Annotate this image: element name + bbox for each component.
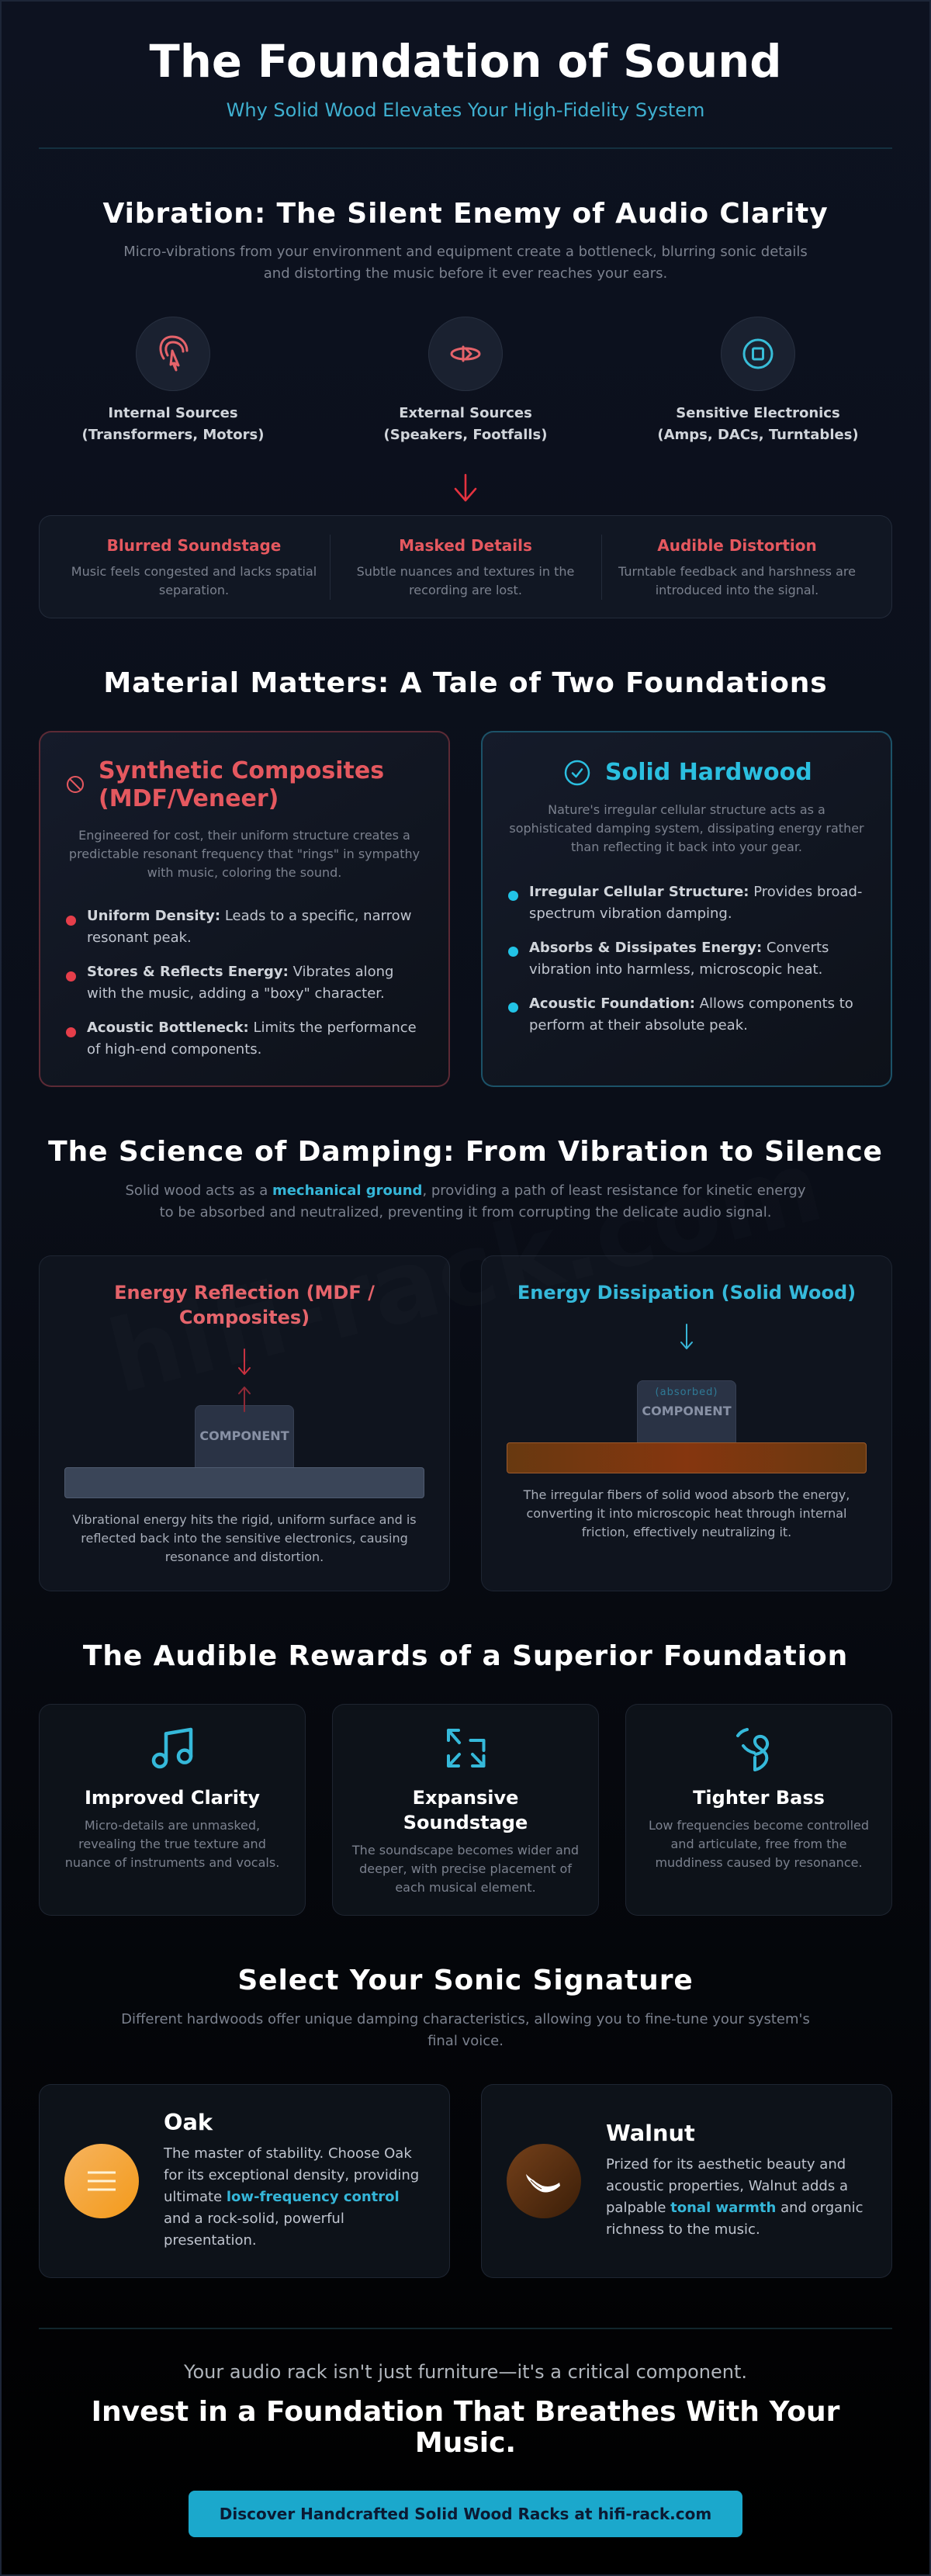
hardwood description: Nature's irregular cellular structure acts as a xyxy=(548,802,825,817)
label: external sources xyxy=(383,405,547,443)
effect text: masked details: Subtle nuances and textures in the xyxy=(357,564,574,579)
label: sensitive electronics xyxy=(657,405,859,443)
component label: COMPONENT xyxy=(642,1404,732,1418)
arrows: incoming and reflected energy xyxy=(238,1349,251,1412)
reward text: deeper, with precise placement of xyxy=(359,1861,572,1876)
signature description xyxy=(121,2011,810,2049)
label: sensitive electronics: (Amps, DACs, Turntables) xyxy=(657,427,859,443)
reward text xyxy=(65,1818,279,1870)
component box xyxy=(195,1405,294,1468)
panel: solid hardwood xyxy=(481,731,892,1087)
bullet: absorbs energy xyxy=(508,947,518,957)
platform: solid wood xyxy=(507,1442,867,1473)
reflection explanation: resonance and distortion. xyxy=(165,1549,324,1564)
oak text: The master of stability. Choose Oak xyxy=(164,2145,412,2162)
subtitle: Why Solid Wood Elevates Your High-Fidelity System xyxy=(227,99,704,121)
bullet text: cellular structure xyxy=(529,883,862,922)
oak text xyxy=(163,2145,419,2249)
damping description: to be absorbed and neutralized, preventing it from corrupting the delicate audio signal. xyxy=(160,1204,771,1220)
closing headline: Music. xyxy=(415,2427,516,2459)
icon: oak swatch xyxy=(64,2144,139,2218)
oak text: ultimate low-frequency control xyxy=(164,2189,400,2205)
effect text: audible distortion: Turntable feedback and harshness are xyxy=(618,564,856,579)
heading: sonic signature: Select Your Sonic Signature xyxy=(237,1965,694,1996)
vibration description: Micro-vibrations from your environment and equipment create a bottleneck, blurring sonic details xyxy=(123,244,808,260)
bullet text: absorbs energy: Absorbs & Dissipates Energy: Converts xyxy=(529,939,829,956)
oak title: Oak xyxy=(164,2109,213,2135)
reflection explanation: Vibrational energy hits the rigid, uniform surface and is xyxy=(72,1511,417,1527)
signature description: final voice. xyxy=(427,2033,504,2049)
reward title: Tighter Bass xyxy=(693,1787,825,1809)
heading: solid hardwood: Solid Hardwood xyxy=(605,759,812,786)
heading: energy reflection: Composites) xyxy=(179,1307,310,1328)
effect text: audible distortion: introduced into the signal. xyxy=(656,583,819,597)
bullet text: acoustic foundation xyxy=(529,995,853,1034)
heading: energy reflection xyxy=(114,1282,375,1328)
bullet: acoustic bottleneck xyxy=(66,1027,76,1037)
effect text: blurred soundstage: separation. xyxy=(159,583,229,597)
reward text: The soundscape becomes wider and xyxy=(352,1843,579,1858)
component label: COMPONENT xyxy=(199,1428,289,1443)
bullet text: uniform density: resonant peak. xyxy=(87,930,192,946)
dissipation explanation: The irregular fibers of solid wood absorb the energy, xyxy=(524,1487,850,1502)
heading: material matters: Material Matters: A Tale of Two Foundations xyxy=(103,667,828,699)
synthetic description: with music, coloring the sound. xyxy=(147,865,341,880)
heading: synthetic composites: Synthetic Composites xyxy=(99,757,384,784)
effect: audible distortion: Audible Distortion xyxy=(657,536,817,555)
effect text: masked details: recording are lost. xyxy=(409,583,522,597)
panel: expansive soundstage xyxy=(332,1704,599,1916)
label: internal sources xyxy=(82,405,264,443)
effect: blurred soundstage: Blurred Soundstage xyxy=(107,536,281,555)
reward text: Low frequencies become controlled xyxy=(649,1818,869,1833)
header divider xyxy=(39,147,892,149)
footer divider xyxy=(39,2328,892,2329)
dissipation explanation: friction, effectively neutralizing it. xyxy=(582,1525,791,1539)
bullet text: acoustic foundation: perform at their absolute peak. xyxy=(529,1016,748,1034)
bullet text: stores energy xyxy=(87,964,393,1002)
closing line: Your audio rack isn't just furniture—it's a critical component. xyxy=(184,2361,747,2383)
panel: synthetic composites xyxy=(39,731,450,1087)
heading: vibration: Vibration: The Silent Enemy of Audio Clarity xyxy=(102,198,829,230)
reward text: revealing the true texture and xyxy=(78,1837,266,1851)
reward title xyxy=(403,1787,528,1833)
damping description xyxy=(126,1182,805,1220)
panel: oak xyxy=(39,2084,450,2278)
absorbed label: (absorbed) xyxy=(656,1387,718,1398)
synthetic description: predictable resonant frequency that "rings" in sympathy xyxy=(69,847,420,861)
reward text xyxy=(649,1818,869,1870)
icon: check circle xyxy=(565,760,590,785)
closing headline xyxy=(92,2396,839,2459)
reward title: Improved Clarity xyxy=(85,1787,260,1809)
bullet text: stores energy: Stores & Reflects Energy: Vibrates along xyxy=(87,964,393,980)
icon: expand arrows xyxy=(447,1729,486,1768)
bullet: uniform density xyxy=(66,916,76,926)
panel: tighter bass xyxy=(625,1704,892,1916)
reflection explanation xyxy=(72,1511,417,1564)
arrow: incoming energy xyxy=(680,1324,693,1349)
call to action button: Discover Handcrafted Solid Wood Racks at hifi-rack.com xyxy=(220,2505,711,2523)
reward text: nuance of instruments and vocals. xyxy=(65,1855,279,1870)
bullet text: cellular structure: Irregular Cellular Structure: Provides broad- xyxy=(529,883,862,900)
heading: science of damping: The Science of Damping: From Vibration to Silence xyxy=(48,1136,883,1168)
reward text: each musical element. xyxy=(395,1880,536,1895)
heading: synthetic composites xyxy=(99,757,384,812)
reward title: Soundstage xyxy=(403,1812,528,1833)
effect text: masked details xyxy=(357,564,574,597)
heading: energy reflection: Energy Reflection (MDF / xyxy=(114,1282,375,1304)
effect text: audible distortion xyxy=(618,564,856,597)
oak text: and a rock-solid, powerful xyxy=(164,2211,344,2227)
bullet text: absorbs energy xyxy=(529,939,829,978)
bullet text: absorbs energy: vibration into harmless, microscopic heat. xyxy=(529,961,822,978)
icon: internal sources xyxy=(136,317,210,391)
synthetic description: Engineered for cost, their uniform structure creates a xyxy=(78,828,410,843)
vibration description: and distorting the music before it ever reaches your ears. xyxy=(264,265,667,282)
dissipation explanation xyxy=(523,1487,850,1539)
call to action button xyxy=(189,2491,742,2537)
walnut title: Walnut xyxy=(606,2120,695,2146)
hardwood description xyxy=(509,802,864,854)
walnut text: Prized for its aesthetic beauty and xyxy=(606,2156,846,2173)
label: sensitive electronics: Sensitive Electronics xyxy=(676,405,840,421)
component box xyxy=(637,1380,736,1443)
bullet text: stores energy: with the music, adding a "boxy" character. xyxy=(87,985,385,1002)
damping description: Solid wood acts as a mechanical ground, providing a path of least resistance for kinetic energy xyxy=(126,1182,805,1199)
effect text: blurred soundstage: Music feels congested and lacks spatial xyxy=(71,564,317,579)
dissipation explanation: converting it into microscopic heat through internal xyxy=(526,1506,847,1521)
icon: bass squiggle xyxy=(735,1728,770,1771)
icon: prohibited xyxy=(67,776,84,793)
reward text: Micro-details are unmasked, xyxy=(85,1818,260,1833)
bullet text: acoustic bottleneck xyxy=(87,1020,417,1058)
label: internal sources: Internal Sources xyxy=(108,405,238,421)
vibration description xyxy=(123,244,808,282)
icon: external sources xyxy=(428,317,503,391)
walnut text: palpable tonal warmth and organic xyxy=(606,2200,864,2216)
oak text: for its exceptional density, providing xyxy=(164,2167,419,2183)
bullet: cellular structure xyxy=(508,891,518,901)
closing headline: Invest in a Foundation That Breathes With Your xyxy=(92,2396,839,2428)
bullet: acoustic foundation xyxy=(508,1002,518,1013)
heading: energy dissipation: Energy Dissipation (Solid Wood) xyxy=(517,1282,856,1304)
bullet text: acoustic foundation: Acoustic Foundation: Allows components to xyxy=(529,995,853,1012)
panel: improved clarity xyxy=(39,1704,306,1916)
effect: masked details: Masked Details xyxy=(399,536,532,555)
heading: audible rewards: The Audible Rewards of a Superior Foundation xyxy=(83,1640,848,1672)
panel: effects of vibration xyxy=(39,515,892,618)
walnut text xyxy=(606,2156,864,2238)
signature description: Different hardwoods offer unique damping characteristics, allowing you to fine-tune your system's xyxy=(121,2011,810,2027)
platform: MDF xyxy=(64,1467,424,1498)
icon: music notes xyxy=(152,1727,192,1769)
panel: walnut xyxy=(481,2084,892,2278)
reward text: muddiness caused by resonance. xyxy=(655,1855,863,1870)
bullet: stores energy xyxy=(66,971,76,982)
icon: walnut swatch xyxy=(507,2144,581,2218)
oak text: presentation. xyxy=(164,2232,257,2249)
synthetic description xyxy=(69,828,420,880)
heading: synthetic composites: (MDF/Veneer) xyxy=(99,785,279,812)
hardwood description: than reflecting it back into your gear. xyxy=(571,840,802,854)
bullet text: acoustic bottleneck: of high-end components. xyxy=(87,1041,261,1058)
label: internal sources: (Transformers, Motors) xyxy=(82,427,264,443)
label: external sources: (Speakers, Footfalls) xyxy=(383,427,547,443)
walnut text: acoustic properties, Walnut adds a xyxy=(606,2178,848,2194)
bullet text: uniform density: Uniform Density: Leads to a specific, narrow xyxy=(87,908,411,924)
panel: energy dissipation xyxy=(481,1255,892,1591)
reward text xyxy=(352,1843,579,1895)
hardwood description: sophisticated damping system, dissipating energy rather xyxy=(509,821,864,836)
icon: sensitive electronics xyxy=(721,317,795,391)
walnut text: richness to the music. xyxy=(606,2221,760,2238)
reward text: and articulate, free from the xyxy=(670,1837,846,1851)
reward title: Expansive xyxy=(413,1787,518,1809)
label: external sources: External Sources xyxy=(399,405,532,421)
reflection explanation: reflected back into the sensitive electronics, causing xyxy=(81,1530,408,1546)
bullet text: uniform density xyxy=(87,908,411,946)
effect text: blurred soundstage xyxy=(71,564,317,597)
panel: energy reflection xyxy=(39,1255,450,1591)
arrow: sources to effects xyxy=(455,473,476,501)
bullet text: cellular structure: spectrum vibration damping. xyxy=(529,905,732,922)
title: The Foundation of Sound xyxy=(150,36,781,88)
bullet text: acoustic bottleneck: Acoustic Bottleneck: Limits the performance xyxy=(87,1020,417,1036)
watermark: hifi-rack.com xyxy=(98,1128,833,1416)
